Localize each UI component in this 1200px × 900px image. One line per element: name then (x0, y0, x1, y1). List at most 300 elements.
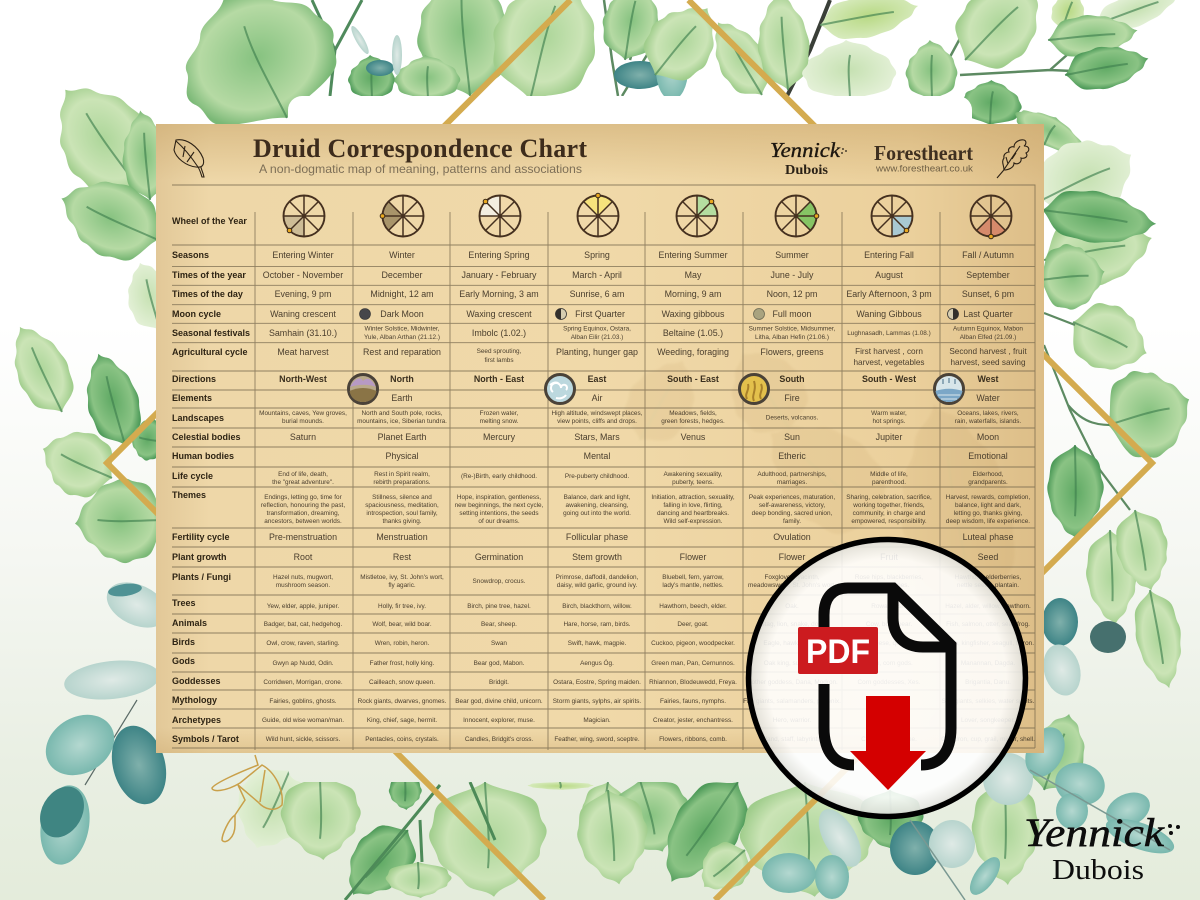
row: trees (267, 603, 1031, 610)
row: human bodies: Physical (385, 451, 419, 461)
row: moon cycle: Waxing gibbous (662, 309, 725, 319)
row: plant growth: Root (294, 552, 313, 562)
row: trees: Holly, fir tree, ivy. (378, 603, 426, 610)
row: seasonal festivals: Imbolc (1.02.) (472, 328, 526, 338)
row: landscapes: High altitude, windswept places, (552, 410, 643, 417)
row: themes: deep bonding, sacred union, (752, 510, 833, 517)
row: seasons: Entering Winter (272, 250, 334, 260)
icon: fire medallion (740, 374, 768, 404)
row: life cycle (272, 471, 1008, 486)
row: landscapes: burial mounds. (282, 418, 324, 425)
row labels: Gods (172, 656, 195, 666)
row: themes: Stillness, silence and (372, 494, 432, 501)
row: themes (261, 494, 1030, 525)
row: birds: Swift, hawk, magpie. (568, 640, 627, 647)
logo: Forestheart: www.forestheart.co.uk (875, 164, 973, 174)
row: trees: Oak. (785, 603, 799, 610)
row: themes: introspection, soul family, (366, 510, 438, 517)
row: animals (264, 621, 1030, 628)
row: goddesses: Cailleach, snow queen. (369, 679, 435, 686)
table grid (172, 185, 1035, 750)
row: agricultural cycle: Flowers, greens (760, 347, 824, 357)
row: times of the day: Morning, 9 am (665, 289, 721, 299)
row: themes: Endings, letting go, time for (264, 494, 343, 501)
icon: earth medallion (348, 374, 378, 404)
row: seasons: Summer (775, 250, 809, 260)
row: plant growth (294, 552, 998, 562)
row: human bodies: Etheric (778, 451, 806, 461)
row: mythology: Storm giants, sylphs, air spirits. (553, 698, 641, 705)
row: plants and fungi: Rose hips, blackberries, (855, 574, 923, 581)
row: birds: Owl, crow, raven, starling. (266, 640, 340, 647)
row: celestial bodies: Sun (784, 432, 800, 442)
wheel of the year icons (284, 193, 1012, 239)
row: animals: Badger, bat, cat, hedgehog. (264, 621, 342, 628)
row: plant growth: Flower (680, 552, 706, 562)
row: plants and fungi: apple, grapes. (869, 582, 909, 589)
row: landscapes: view points, cliffs and drops. (557, 418, 637, 425)
row: trees: Hazel, alder, willow, hawthorn. (945, 603, 1031, 610)
row: times of the year: May (685, 270, 702, 280)
row: mythology: Bear god, divine child, unicorn. (455, 698, 543, 705)
row: directions: North-West (279, 374, 327, 384)
row: archetypes: Creator, jester, enchantress. (653, 717, 733, 724)
row: plant growth: Seed (978, 552, 998, 562)
row: gods: Aengus Óg. (580, 658, 614, 667)
row: seasons: Entering Summer (658, 250, 728, 260)
wheel: entering summer (676, 196, 718, 236)
row: times of the day: Noon, 12 pm (767, 289, 817, 299)
row: times of the year: August (875, 270, 903, 280)
row: themes: self-awareness, victory, (759, 502, 825, 509)
row labels: Times of the day (172, 289, 243, 299)
row: times of the year: March - April (572, 270, 622, 280)
row: life cycle: the "great adventure". (272, 479, 334, 486)
row labels: Animals (172, 618, 207, 628)
row: directions: South - West (862, 374, 916, 384)
glass circle (748, 540, 1026, 816)
row: animals: Hare, horse, ram, birds. (563, 621, 631, 628)
icon: air medallion (546, 374, 574, 404)
row: themes: community, in charge and (853, 510, 926, 517)
row: life cycle: Pre-puberty childhood. (565, 473, 629, 480)
row: seasonal festivals: Yule, Alban Arthan (21.12.) (364, 334, 440, 341)
row: agricultural cycle: harvest, vegetables (853, 358, 925, 367)
row: symbols and tarot: Feather, wing, sword, sceptre. (554, 736, 640, 743)
row: goddesses: Ostara, Eostre, Spring maiden. (553, 679, 641, 686)
row: animals: Wolf, bear, wild boar. (372, 621, 432, 628)
row: mythology: Rock giants, dwarves, gnomes. (358, 698, 447, 705)
row: trees: Yew, elder, apple, juniper. (267, 603, 339, 610)
row: celestial bodies: Moon (977, 432, 999, 442)
row: trees: Hawthorn, beech, elder. (659, 603, 727, 610)
row: archetypes: Guide, old wise woman/man. (262, 717, 344, 724)
row: birds (266, 640, 1034, 647)
row: animals: Bear, sheep. (481, 621, 517, 628)
row: animals: Deer, goat. (677, 621, 709, 628)
row: elements: Earth (391, 393, 413, 403)
row: goddesses: Bridgit. (489, 679, 509, 686)
row: fertility cycle: Pre-menstruation (269, 532, 337, 542)
row: landscapes: North and South pole, rocks, (362, 410, 443, 417)
white cut-out panel (288, 96, 972, 782)
row: plants and fungi: Hazel nuts, mugwort, (273, 574, 333, 581)
row: animals: Fish, salmon, otter, seal, frog. (946, 621, 1030, 628)
row: times of the year: January - February (462, 270, 537, 280)
row: moon cycle (270, 309, 1013, 319)
row: directions: West (977, 374, 999, 384)
row: seasonal festivals: Alban Elfed (21.09.) (960, 334, 1016, 341)
row: themes: Harvest, rewards, completion, (946, 494, 1030, 501)
row: plant growth: Germination (475, 552, 523, 562)
row: plants and fungi: Foxglove, hyacinth, (764, 574, 820, 581)
row: landscapes: green forests, hedges. (661, 418, 725, 425)
row: mythology: Fire giants, salamanders, phoenix. (743, 698, 841, 705)
row: life cycle: Awakening sexuality, (663, 471, 723, 478)
row: times of the day: Early Afternoon, 3 pm (846, 289, 932, 299)
row: landscapes: Mountains, caves, Yew groves, (259, 410, 347, 417)
row: landscapes: Warm water, (871, 410, 907, 417)
row: symbols and tarot: Corn dollies, divine. (861, 736, 917, 743)
row: symbols and tarot: Flowers, ribbons, comb. (659, 736, 727, 743)
row: directions: East (588, 374, 606, 384)
row: plants and fungi: lady's mantle, nettles. (662, 582, 724, 589)
icon: download arrow (850, 696, 926, 790)
row: life cycle: grandparents. (968, 479, 1008, 486)
row: trees: Birch, blackthorn, willow. (562, 603, 632, 610)
row: landscapes: mountains, ice, Siberian tundra. (357, 418, 447, 425)
row: plant growth: Stem growth (572, 552, 622, 562)
row: symbols and tarot: Pentacles, coins, crystals. (365, 736, 439, 743)
row: archetypes (262, 717, 1015, 724)
row: life cycle: (Re-)Birth, early childhood. (461, 473, 537, 480)
row: times of the day: Midnight, 12 am (370, 289, 434, 299)
wheel: spring (578, 193, 618, 236)
row: times of the year: June - July (771, 270, 814, 280)
row: themes: thanks giving. (382, 518, 422, 525)
row: plants and fungi: nettle seeds, plantain. (957, 582, 1019, 589)
row: directions (279, 374, 999, 384)
row: themes: transformation, dreaming, (267, 510, 340, 517)
row: gods: Green man, Pan, Cernunnos. (651, 660, 735, 667)
row: gods: Lugh, corn gods. (865, 660, 913, 667)
row: seasonal festivals: Summer Solstice, Midsummer, (749, 326, 836, 332)
row: fertility cycle: Ovulation (773, 532, 811, 542)
row labels: Plants / Fungi (172, 572, 231, 582)
row: times of the year (263, 270, 1010, 280)
row: agricultural cycle: Planting, hunger gap (556, 347, 638, 357)
row labels: Wheel of the Year (172, 216, 247, 226)
row: seasonal festivals: Autumn Equinox, Mabon (953, 326, 1023, 332)
row: themes: falling in love, flirting, (663, 502, 723, 509)
row labels: Times of the year (172, 270, 246, 280)
row: landscapes: rain, waterfalls, islands. (955, 418, 1021, 425)
row: agricultural cycle: harvest, seed saving (950, 358, 1026, 367)
row: agricultural cycle: Second harvest , fruit (949, 347, 1027, 356)
row: landscapes: Meadows, fields, (669, 410, 717, 417)
row labels: Agricultural cycle (172, 347, 248, 357)
row: life cycle: rebirth preparations. (373, 479, 431, 486)
row: agricultural cycle: Meat harvest (277, 347, 329, 357)
row: directions: North (390, 374, 414, 384)
row: goddesses: Corn goddesses, Xes. (858, 679, 921, 686)
row: plants and fungi: Primrose, daffodil, dandelion, (556, 574, 639, 581)
row: archetypes: Innocent, explorer, muse. (463, 717, 535, 724)
row: life cycle: Elderhood, (973, 471, 1004, 478)
row: plants and fungi: daisy, wild garlic, ground ivy. (557, 582, 637, 589)
row: trees: Birch, pine tree, hazel. (467, 603, 531, 610)
row: themes: Wild self-expression. (664, 518, 723, 525)
row: times of the year: September (966, 270, 1010, 280)
row labels: Landscapes (172, 413, 224, 423)
row: life cycle: puberty, teens. (672, 479, 714, 486)
row: birds: Geese, quail. (870, 640, 908, 647)
row: goddesses: Mother goddess, Dana, Modron. (746, 679, 838, 686)
callout: PDF download badge (748, 540, 1026, 816)
row: landscapes: Frozen water, (480, 410, 519, 417)
row: gods: Father frost, holly king. (370, 660, 435, 667)
row: moon cycle: Waxing crescent (466, 309, 532, 319)
row: seasons: Fall / Autumn (962, 250, 1014, 260)
row: themes: family. (783, 518, 801, 525)
row: life cycle: Adulthood, partnerships, (757, 471, 827, 478)
row: seasonal festivals: Lughnasadh, Lammas (1.08.) (847, 330, 931, 337)
row: symbols and tarot: Wand, staff, labyrinth. (761, 736, 823, 743)
parchment sheet (156, 124, 1044, 753)
row labels: Mythology (172, 695, 217, 705)
row: celestial bodies: Planet Earth (378, 432, 426, 442)
row: themes: Sharing, celebration, sacrifice, (846, 494, 932, 501)
row: fertility cycle: Follicular phase (566, 532, 628, 542)
row: times of the day: Early Morning, 3 am (459, 289, 539, 299)
row: themes: of our dreams. (478, 518, 520, 525)
row: animals: Cow, boar, bear. (866, 621, 912, 628)
row: elements: Air (592, 393, 602, 403)
row: moon cycle: Full moon (773, 309, 812, 319)
row labels: Birds (172, 637, 195, 647)
row: seasonal festivals: Alban Eilir (21.03.) (571, 334, 623, 341)
row: gods: Manannan, Dagda. (961, 660, 1015, 667)
row: mythology: Sea giants, selkies, water spirits. (942, 698, 1035, 705)
row: fertility cycle: Menstruation (376, 532, 428, 542)
row: plants and fungi: Mistletoe, ivy, St. John's wort, (360, 574, 444, 581)
row: times of the day: Evening, 9 pm (275, 289, 331, 299)
row: seasons: Winter (389, 250, 415, 260)
row: symbols and tarot: Wild hunt, sickle, scissors. (266, 736, 341, 743)
row: agricultural cycle: First harvest , corn (855, 347, 923, 356)
PDF label (798, 627, 878, 674)
row: themes: awakening, cleansing, (566, 502, 629, 509)
gold monogram sketch (212, 755, 282, 842)
row: celestial bodies: Venus (681, 432, 706, 442)
title: Druid Correspondence Chart (253, 134, 587, 163)
row: archetypes: King, chief, sage, hermit. (367, 717, 437, 724)
row: life cycle: Rest in Spirit realm, (374, 471, 430, 478)
row: themes: going out into the world. (563, 510, 631, 517)
row: goddesses (263, 679, 1011, 686)
row: fertility cycle (269, 532, 1013, 542)
row: themes: Balance, dark and light, (564, 494, 631, 501)
row: agricultural cycle: Seed sprouting, (477, 348, 522, 355)
moon phase icons (360, 308, 959, 320)
row: goddesses: Corridwen, Morrigan, crone. (263, 679, 343, 686)
row: symbols and tarot: Cauldron, cup, grail, mirror, shell. (941, 736, 1035, 743)
row: seasonal festivals (269, 326, 1023, 341)
logo: Yennick Dubois: Dubois (785, 163, 829, 178)
row: celestial bodies: Saturn (290, 432, 316, 442)
row: birds: Cuckoo, pigeon, woodpecker. (651, 640, 735, 647)
wheel: entering fall (872, 196, 912, 236)
row: themes: reflection, honouring the past, (261, 502, 345, 509)
row: plants and fungi: Hawthorn, elderberries, (955, 574, 1021, 581)
row labels: Fertility cycle (172, 532, 230, 542)
row labels: Directions (172, 374, 216, 384)
row labels: Themes (172, 490, 206, 500)
row: archetypes: Magician. (583, 717, 611, 724)
row: plant growth: Rest (393, 552, 412, 562)
row: life cycle: marriages. (777, 479, 807, 486)
row: celestial bodies (290, 432, 999, 442)
row: archetypes: Hero, warrior. (773, 717, 811, 724)
row: agricultural cycle: Rest and reparation (363, 347, 441, 357)
wheel: entering spring (480, 196, 520, 236)
panel: parchment chart (156, 124, 1044, 753)
row: times of the day (275, 289, 1014, 299)
row: landscapes: Deserts, volcanos. (766, 414, 819, 422)
row: moon cycle: Last Quarter (963, 309, 1013, 319)
row labels (172, 216, 250, 744)
row: agricultural cycle: Weeding, foraging (657, 347, 729, 357)
row: seasonal festivals: Litha, Alban Hefin (21.06.) (755, 334, 829, 341)
row: moon cycle: First Quarter (575, 309, 625, 319)
row: landscapes (259, 410, 1021, 425)
row: gods: Bear god, Mabon. (474, 660, 525, 667)
row: landscapes: melting snow. (480, 418, 519, 425)
logo: Forestheart (874, 141, 973, 174)
row labels: Trees (172, 598, 196, 608)
row: birds: Swan, kingfisher, seagull, heron. (942, 640, 1034, 647)
row: archetypes: Lover, songkeeper. (961, 717, 1015, 724)
row: themes: working together, friends, (852, 502, 925, 509)
row: symbols and tarot: Candles, Bridgit's cross. (465, 736, 533, 743)
row: elements: Fire (784, 393, 800, 403)
row: animals: Stag, lion, snake, dog. (760, 621, 824, 628)
row: directions: South (779, 374, 805, 384)
row: times of the year: October - November (263, 270, 343, 280)
icon: document outline (824, 588, 951, 765)
row: landscapes: hot springs. (872, 418, 906, 425)
row: times of the year: December (382, 270, 423, 280)
row: landscapes: Oceans, lakes, rivers, (957, 410, 1019, 417)
row: seasonal festivals: Beltaine (1.05.) (663, 328, 723, 338)
row: seasons (272, 250, 1014, 260)
row: plants and fungi (273, 574, 1021, 589)
row labels: Human bodies (172, 451, 234, 461)
row: mythology (269, 698, 1035, 705)
row: gods: Oak king, sun gods. (764, 660, 820, 667)
row: seasonal festivals: Winter Solstice, Midwinter, (365, 326, 440, 332)
row: life cycle: Middle of life, (870, 471, 908, 478)
row: themes: deep wisdom, life experience. (946, 518, 1030, 525)
row labels: Plant growth (172, 552, 226, 562)
row labels: Symbols / Tarot (172, 734, 239, 744)
row: agricultural cycle (277, 347, 1027, 367)
row: themes: new beginnings, the next cycle, (455, 502, 544, 509)
row: plants and fungi: mushroom season. (276, 582, 330, 589)
row: mythology: Fairies, fauns, nymphs. (660, 698, 726, 705)
icon: oak leaf (997, 140, 1029, 178)
row: seasons: Spring (584, 250, 610, 260)
row labels: Seasons (172, 250, 209, 260)
row: moon cycle: Waning crescent (270, 309, 336, 319)
row: moon cycle: Waning Gibbous (856, 309, 922, 319)
wheel: winter (380, 196, 424, 236)
row: goddesses: Rhiannon, Blodeuwedd, Freya. (649, 679, 737, 686)
row: themes: empowered, responsibility. (851, 518, 927, 525)
row: life cycle: parenthood. (872, 479, 906, 486)
row labels: Goddesses (172, 676, 221, 686)
logo: Yennick Dubois signature: Dubois (1052, 854, 1144, 886)
row: celestial bodies: Jupiter (876, 432, 902, 442)
row: seasons: Entering Spring (468, 250, 530, 260)
row: plants and fungi: meadowsweet, St. John's wort. (748, 582, 836, 589)
row: gods: Gwyn ap Nudd, Odin. (272, 660, 334, 667)
logo: Yennick Dubois signature (1024, 810, 1180, 886)
row labels: Moon cycle (172, 309, 221, 319)
row: elements (391, 393, 1000, 403)
row: themes: Hope, inspiration, gentleness, (457, 494, 541, 501)
row labels: Celestial bodies (172, 432, 241, 442)
row: directions: South - East (667, 374, 719, 384)
row: fertility cycle: Luteal phase (963, 532, 1013, 542)
row: agricultural cycle: first lambs (484, 357, 514, 364)
row: birds: Swan (491, 640, 507, 647)
row: human bodies: Mental (584, 451, 610, 461)
row: celestial bodies: Stars, Mars (574, 432, 620, 442)
row labels: Archetypes (172, 715, 221, 725)
row: plant growth: Fruit (880, 552, 898, 562)
icon: birch leaf (174, 140, 204, 177)
row: times of the day: Sunrise, 6 am (570, 289, 624, 299)
row: mythology: Fairies, goblins, ghosts. (269, 698, 337, 705)
row: birds: Wren, robin, heron. (375, 640, 430, 647)
wheel: summer (776, 196, 819, 236)
row: human bodies: Emotional (968, 451, 1008, 461)
row: human bodies (385, 451, 1008, 461)
icon: water medallion (934, 374, 964, 404)
row: trees: Rowan, ash. (871, 603, 907, 610)
row: birds: Eagle, hawk, falcon. (763, 640, 821, 647)
row: plants and fungi: Snowdrop, crocus. (473, 578, 526, 585)
wheel: entering winter (284, 196, 324, 236)
logo: Yennick Dubois signature: Yennick (1024, 810, 1165, 855)
row: themes: balance, light and dark, (955, 502, 1021, 509)
row: goddesses: Brigantia, Danu. (965, 679, 1011, 686)
logo: Yennick Dubois (770, 138, 847, 178)
row: symbols and tarot (266, 736, 1035, 743)
subtitle: A non-dogmatic map of meaning, patterns and associations (259, 163, 582, 176)
row: life cycle: End of life, death, (278, 471, 328, 478)
wheel: fall (970, 196, 1012, 239)
row: elements: Water (976, 393, 1000, 403)
row: plants and fungi: Bluebell, fern, yarrow, (662, 574, 724, 581)
row: themes: Initiation, attraction, sexuality, (651, 494, 735, 501)
row: seasonal festivals: Spring Equinox, Ostara, (563, 326, 631, 332)
row: themes: spaciousness, meditation, (365, 502, 439, 509)
row: themes: ancestors, between worlds. (264, 518, 342, 525)
row: gods (272, 658, 1015, 667)
row labels: Elements (172, 393, 212, 403)
